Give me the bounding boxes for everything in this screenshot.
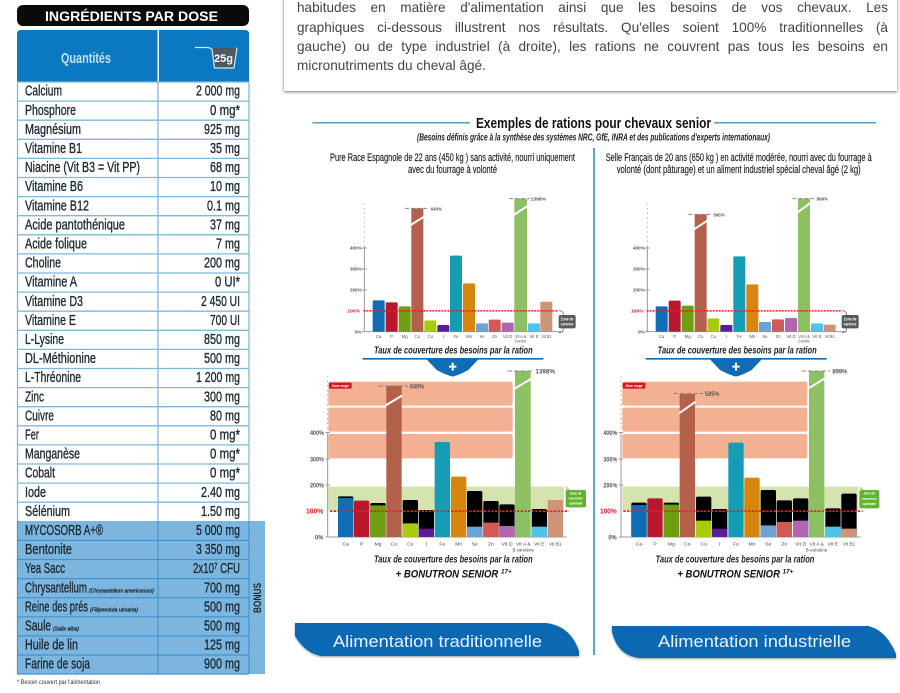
chart: large right, ration + Bonutron: Vit B1 <box>843 541 856 547</box>
chart: small right, ration industrielle: P <box>673 334 676 339</box>
chart: small right, ration industrielle: Zn <box>775 334 781 339</box>
chart: small right, ration industrielle: Vit E <box>812 334 822 339</box>
chart: large right, ration + Bonutron: Vit D <box>795 541 807 547</box>
chart: small right, ration industrielle: 0% <box>638 329 645 335</box>
text box: introduction: micronutriments du cheval âgé. <box>297 58 486 73</box>
table rows: ingredient names: Vitamine D3 <box>25 293 83 310</box>
chart: large right, ration + Bonutron: Ca <box>636 541 642 547</box>
table rows: ingredient names: Zinc <box>25 388 44 405</box>
table rows: quantities: 5 000 mg <box>196 522 240 539</box>
chart: large left, ration + Bonutron: I <box>426 541 427 547</box>
chart: large right, ration + Bonutron: Cu <box>700 541 707 547</box>
table rows: quantities: 1.50 mg <box>201 503 240 520</box>
chart: large right, ration + Bonutron: Zn <box>781 541 787 547</box>
tab: alimentation traditionnelle <box>295 623 579 656</box>
table rows: ingredient names: Reine des prés <box>25 598 88 615</box>
chart: large right, ration + Bonutron: couverture <box>862 497 877 501</box>
table rows: ingredient names: DL-Méthionine <box>25 350 96 367</box>
chart: small right, ration industrielle: Zone de <box>844 317 857 322</box>
chart: small right, ration industrielle: 100% <box>631 308 644 314</box>
chart: small right, ration industrielle: Se <box>762 334 768 339</box>
description: left ration: Pure Race Espagnole de 22 ans (450 kg ) sans activité, nourri uniquement <box>330 152 575 164</box>
chart: large right, ration + Bonutron: Zone de <box>863 492 876 496</box>
chart: small right, ration industrielle: Cu <box>711 334 717 339</box>
chart: small right, ration industrielle: carence <box>844 322 857 327</box>
table rows: quantities: 2.40 mg <box>201 484 240 501</box>
chart: small left, ration traditionnelle: Fe <box>453 334 459 339</box>
table rows: ingredient names: Cuivre <box>25 407 54 424</box>
chart: large left, ration + Bonutron: 100% <box>306 506 324 515</box>
chart: small left, ration traditionnelle: Ca <box>376 334 382 339</box>
chart: large left, ration + Bonutron <box>306 369 586 581</box>
table rows: ingredient names: Saule <box>25 618 51 634</box>
table rows: ingredient names: Cobalt <box>25 465 56 482</box>
chart: small right, ration industrielle: 200% <box>633 288 645 294</box>
chart: large left, ration + Bonutron: 1398% <box>535 369 556 375</box>
text box: introduction: graphiques ci-dessous illustrent nos résultats. Qu'elles soient 100% traditionnelles (à <box>297 20 888 34</box>
table rows: quantities: 80 mg <box>210 407 240 424</box>
table rows: ingredient names: Iode <box>25 484 46 501</box>
chart: small left, ration traditionnelle: Taux de couverture des besoins par la ration <box>374 345 533 356</box>
table rows: quantities: 0 UI* <box>215 274 240 291</box>
chart: large left, ration + Bonutron: couverture <box>568 496 584 500</box>
heading: exemples de rations <box>312 115 876 144</box>
table rows: ingredient names: Bentonite <box>25 541 72 558</box>
table rows: quantities: 3 350 mg <box>196 541 240 558</box>
chart: small right, ration industrielle: Fe <box>737 334 742 339</box>
table rows: quantities: 125 mg <box>204 637 240 654</box>
chart: large right, ration + Bonutron: 100% <box>600 506 617 515</box>
table rows: ingredient names: (Filipendula ulmaria) <box>90 607 138 613</box>
chart: small left, ration traditionnelle: Vit E <box>529 334 539 339</box>
table rows: ingredient names: (Chrysantellum americanum) <box>89 588 154 594</box>
chart: small left, ration traditionnelle: Se <box>479 334 485 339</box>
chart: large left, ration + Bonutron: 17+ <box>501 568 512 575</box>
chart: large right, ration + Bonutron: 595% <box>705 392 720 398</box>
chart: large left, ration + Bonutron: Vit D <box>501 541 513 547</box>
table rows: ingredient names: Calcium <box>25 83 62 100</box>
chart: large right, ration + Bonutron: 0% <box>608 535 617 541</box>
table rows: ingredient names: (Salix alba) <box>53 626 79 632</box>
table header: Quantités <box>61 50 111 67</box>
table rows: ingredient names: Acide pantothénique <box>25 216 125 233</box>
chart: large right, ration + Bonutron: optimale <box>863 502 877 506</box>
chart: small left, ration traditionnelle: 640% <box>431 206 443 211</box>
table rows: quantities: 850 mg <box>204 331 240 348</box>
chart: small left, ration traditionnelle: Vit D <box>503 334 512 339</box>
chart: small left, ration traditionnelle: 200% <box>350 288 362 294</box>
table rows: ingredient names: Vitamine B1 <box>25 140 82 157</box>
table rows: ingredient names: Sélénium <box>25 503 70 520</box>
chart: small left, ration traditionnelle: Zone de <box>561 317 574 322</box>
chart: small right, ration industrielle <box>631 196 859 377</box>
chart: large right, ration + Bonutron: 200% <box>603 483 618 489</box>
table rows: quantities: 37 mg <box>210 216 240 233</box>
table rows: quantities <box>193 83 240 673</box>
chart: small right, ration industrielle: Ca <box>659 334 665 339</box>
chart: large right, ration + Bonutron: Vit E <box>828 541 839 547</box>
table rows: quantities: 2x10⁷ CFU <box>193 560 240 577</box>
chart: small left, ration traditionnelle: P <box>390 334 393 339</box>
chart: large right, ration + Bonutron: Taux de couverture des besoins par la ration <box>656 555 814 566</box>
chart: large left, ration + Bonutron: Ca <box>342 541 349 547</box>
table rows: quantities: 35 mg <box>210 140 240 157</box>
chart: large right, ration + Bonutron: + BONUTRON SENIOR <box>677 569 780 581</box>
chart: small left, ration traditionnelle: Zn <box>492 334 498 339</box>
table rows: ingredient names: Fer <box>25 426 39 444</box>
chart: large right, ration + Bonutron: 899% <box>832 369 848 375</box>
tab: alimentation traditionnelle: Alimentation traditionnelle <box>333 632 542 651</box>
chart: large left, ration + Bonutron: Vit E <box>534 541 545 547</box>
chart: small left, ration traditionnelle: carence <box>561 322 574 327</box>
chart: small left, ration traditionnelle: 300% <box>350 267 362 273</box>
table rows: ingredient names: MYCOSORB A+® <box>25 522 103 539</box>
chart: large right, ration + Bonutron: Se <box>765 541 772 547</box>
chart: large left, ration + Bonutron: 200% <box>310 483 325 489</box>
table rows: ingredient names: Acide folique <box>25 236 87 252</box>
chart: large left, ration + Bonutron: Mn <box>455 541 462 547</box>
table rows: quantities: 0 mg* <box>210 446 240 463</box>
table rows: quantities: 700 mg <box>204 579 240 596</box>
chart: large left, ration + Bonutron: Co <box>391 541 397 547</box>
chart: small right, ration industrielle: Co <box>698 334 704 339</box>
chart: large right, ration + Bonutron: Co <box>684 541 691 547</box>
chart: large left, ration + Bonutron: Zone rouge <box>331 383 350 388</box>
text box: introduction: gauche) ou de type industriel (à droite), les rations ne couvrent pas tous les besoins en <box>297 39 888 54</box>
chart: small right, ration industrielle: Taux de couverture des besoins par la ration <box>658 345 817 356</box>
chart: large right, ration + Bonutron: I <box>719 541 720 547</box>
table rows: ingredient names: Choline <box>25 255 61 272</box>
table rows: quantities: 0 mg* <box>210 102 240 119</box>
chart: small right, ration industrielle: Mg <box>685 334 691 339</box>
chart: large left, ration + Bonutron: Taux de couverture des besoins par la ration <box>374 555 533 566</box>
table rows: ingredient names: Manganèse <box>25 446 80 463</box>
chart: large left, ration + Bonutron: 640% <box>410 384 425 390</box>
table rows: ingredient names: L-Lysine <box>25 331 64 348</box>
panel: ingredients table <box>17 5 265 686</box>
chart: large right, ration + Bonutron: P <box>653 541 657 547</box>
chart: small right, ration industrielle: Vit D <box>786 334 796 339</box>
table rows: quantities: 500 mg <box>204 618 240 634</box>
chart: large right, ration + Bonutron: Zone rouge <box>625 383 643 388</box>
chart: small left, ration traditionnelle: Vit B1 <box>541 334 552 339</box>
chart: large right, ration + Bonutron: 400% <box>603 431 618 437</box>
chart: small left, ration traditionnelle: Vit A & <box>515 334 526 339</box>
chart: large left, ration + Bonutron: 400% <box>310 431 325 437</box>
table rows: quantities: 1 200 mg <box>196 369 240 386</box>
label: bonus: BONUS <box>252 583 264 613</box>
chart: small right, ration industrielle: 300% <box>633 267 645 273</box>
table rows: quantities: 10 mg <box>210 178 240 195</box>
table rows: ingredient names: Niacine (Vit B3 = Vit PP) <box>25 159 140 176</box>
chart: large right, ration + Bonutron: Vit A & <box>809 541 825 547</box>
table rows: quantities: 925 mg <box>204 121 240 138</box>
chart: small left, ration traditionnelle: β-carotène <box>515 338 527 343</box>
chart: large right, ration + Bonutron: Mg <box>668 541 675 547</box>
table rows: quantities: 0.1 mg <box>207 197 240 214</box>
chart: small right, ration industrielle: Vit A & <box>798 334 810 339</box>
chart: large right, ration + Bonutron: 17+ <box>783 568 794 575</box>
icon: scoop 25 g: 25g <box>214 53 233 65</box>
chart: large left, ration + Bonutron: Cu <box>407 541 414 547</box>
chart: small right, ration industrielle: Vit B1 <box>825 334 835 339</box>
chart: small left, ration traditionnelle: 100% <box>347 308 361 314</box>
chart: large left, ration + Bonutron: β-carotène <box>513 547 534 553</box>
chart: small left, ration traditionnelle: 400% <box>350 246 362 252</box>
chart: small left, ration traditionnelle: Mn <box>466 334 473 339</box>
chart: small left, ration traditionnelle: I <box>443 334 444 339</box>
table rows: quantities: 900 mg <box>204 656 240 673</box>
chart: large left, ration + Bonutron: + BONUTRON SENIOR <box>396 569 498 581</box>
table grid <box>17 82 265 674</box>
text box: introduction <box>284 0 897 91</box>
chart: small left, ration traditionnelle: Mg <box>402 334 408 339</box>
chart: large right, ration + Bonutron: β-carotène <box>806 547 828 553</box>
chart: large left, ration + Bonutron: Se <box>472 541 478 547</box>
table rows: ingredient names: Vitamine B12 <box>25 197 89 214</box>
heading: ingrédients par dose <box>17 5 249 26</box>
tab: alimentation industrielle: Alimentation industrielle <box>658 632 851 651</box>
chart: small left, ration traditionnelle: 1398% <box>531 196 547 201</box>
table rows: ingredient names: Vitamine B6 <box>25 178 83 195</box>
heading: exemples de rations: Exemples de rations pour chevaux senior <box>476 115 711 132</box>
chart: large left, ration + Bonutron: Fe <box>439 541 445 547</box>
chart: large right, ration + Bonutron <box>600 369 879 581</box>
table rows: ingredient names: Vitamine A <box>25 274 77 291</box>
chart: large left, ration + Bonutron: 0% <box>315 535 324 541</box>
table rows: quantities: 2 450 UI <box>201 293 240 310</box>
chart: large left, ration + Bonutron: P <box>360 541 364 547</box>
description: right ration <box>606 152 872 176</box>
table rows: ingredient names: Farine de soja <box>25 656 90 673</box>
table rows: ingredient names: Vitamine E <box>25 312 76 329</box>
table rows: ingredient names: Huile de lin <box>25 637 78 654</box>
footnote: * Besoin couvert par l'alimentation <box>17 679 100 686</box>
chart: large left, ration + Bonutron: Mg <box>375 541 382 547</box>
chart: large left, ration + Bonutron: Zone de <box>569 491 582 495</box>
description: left ration: avec du fourrage à volonté <box>408 164 497 176</box>
table rows: quantities: 0 mg* <box>210 465 240 482</box>
chart: small left, ration traditionnelle: 0% <box>355 329 362 335</box>
chart: small right, ration industrielle: 400% <box>633 246 645 252</box>
chart: large right, ration + Bonutron: Mn <box>749 541 756 547</box>
chart: large right, ration + Bonutron: 300% <box>603 457 618 463</box>
table rows: ingredient names: Chrysantellum <box>25 579 87 596</box>
tab: alimentation industrielle <box>612 626 896 658</box>
table rows: quantities: 500 mg <box>204 598 240 615</box>
description: left ration <box>330 152 575 176</box>
chart: small right, ration industrielle: Mn <box>749 334 756 339</box>
chart: small left, ration traditionnelle: Co <box>415 334 421 339</box>
table rows: quantities: 500 mg <box>204 350 240 367</box>
chart: large left, ration + Bonutron: Vit B1 <box>549 541 562 547</box>
table rows: quantities: 7 mg <box>216 236 240 252</box>
table rows: ingredient names: Magnésium <box>25 121 81 138</box>
text box: introduction: habitudes en matière d'alimentation ainsi que les besoins de vos chevaux. Les <box>297 0 888 15</box>
chart: small left, ration traditionnelle: Cu <box>428 334 434 339</box>
chart: small right, ration industrielle: I <box>726 334 727 339</box>
chart: small left, ration traditionnelle <box>347 196 576 377</box>
table rows: quantities: 200 mg <box>204 255 240 272</box>
chart: small right, ration industrielle: β-carotène <box>798 338 810 343</box>
chart: small right, ration industrielle: 595% <box>713 212 725 217</box>
chart: large left, ration + Bonutron: 300% <box>310 457 325 463</box>
chart: large left, ration + Bonutron: Vit A & <box>516 541 531 547</box>
table rows: quantities: 68 mg <box>210 159 240 176</box>
table rows: quantities: 300 mg <box>204 388 240 405</box>
table rows: quantities: 0 mg* <box>210 426 240 444</box>
table rows: quantities: 700 UI <box>210 312 240 329</box>
table header <box>17 30 249 82</box>
table rows: ingredient names <box>25 83 154 673</box>
chart: small right, ration industrielle: 899% <box>817 196 829 201</box>
table rows: ingredient names: Yea Sacc <box>25 560 65 577</box>
chart: large right, ration + Bonutron: Fe <box>733 541 739 547</box>
vertical divider <box>593 148 595 655</box>
chart: large left, ration + Bonutron: Zn <box>488 541 494 547</box>
table rows: ingredient names: Phosphore <box>25 102 76 119</box>
table rows: quantities: 2 000 mg <box>196 83 240 100</box>
table rows: ingredient names: L-Thréonine <box>25 369 81 386</box>
icon: scoop 25 g <box>195 48 237 68</box>
chart: large left, ration + Bonutron: optimale <box>569 501 583 505</box>
heading: ingrédients par dose: INGRÉDIENTS PAR DOSE <box>45 9 218 24</box>
